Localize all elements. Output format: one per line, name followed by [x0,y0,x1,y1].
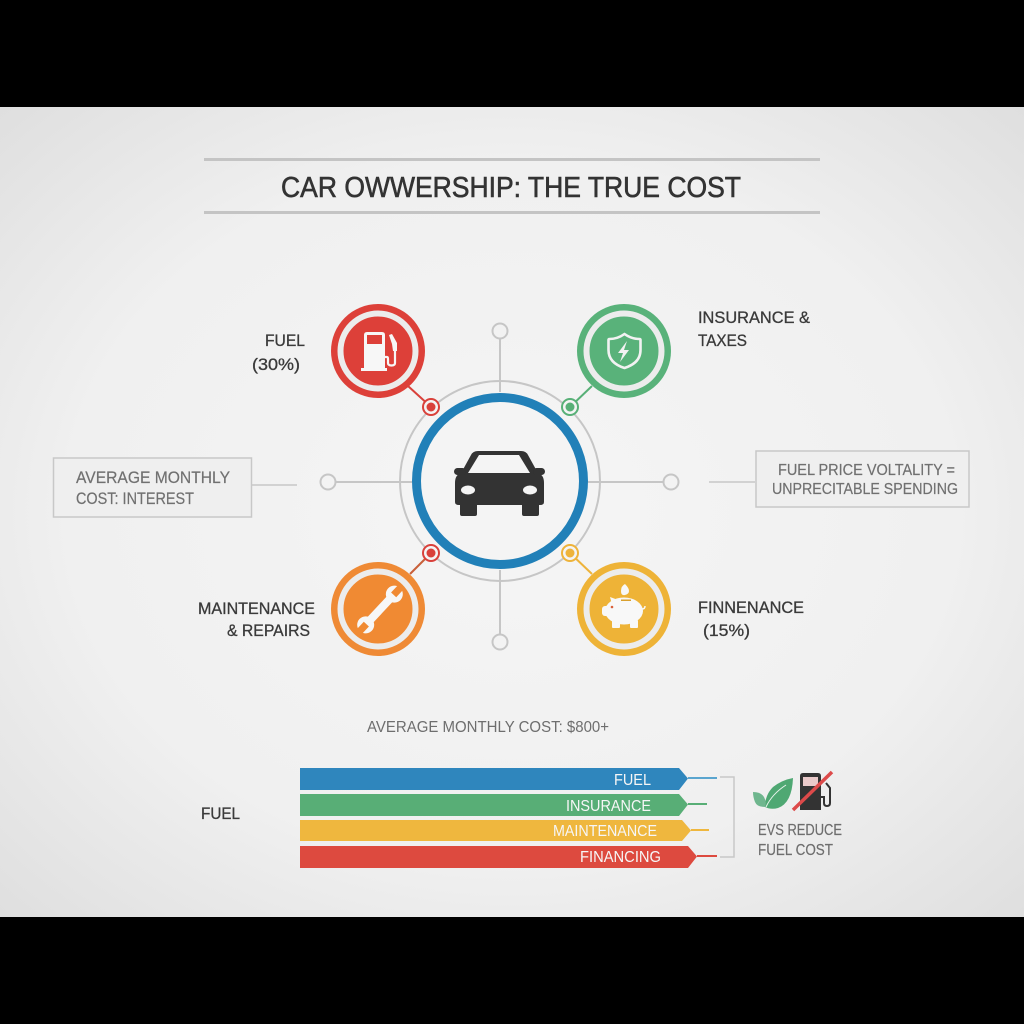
icon: fuel pump [361,332,397,371]
financing label: (15%) [703,622,750,640]
callout: average monthly cost: COST: INTEREST [76,490,194,508]
title block: CAR OWWERSHIP: THE TRUE COST [281,172,741,204]
maintenance node [331,545,439,656]
bar: maintenance: MAINTENANCE [553,823,657,840]
icon: leaf and crossed fuel pump [753,772,832,810]
callout: fuel price volatility: FUEL PRICE VOLTALITY = [778,462,955,479]
bar: maintenance [300,820,709,841]
evs note: FUEL COST [758,842,833,859]
maintenance label: MAINTENANCE [198,600,315,618]
icon: car [454,451,545,516]
bar: fuel: FUEL [614,772,651,789]
stacked cost bars [300,768,717,868]
callout: fuel price volatility: UNPRECITABLE SPENDING [772,481,958,498]
fuel node [331,304,439,415]
callout: average monthly cost: AVERAGE MONTHLY [76,469,230,487]
icon: piggy bank [602,584,645,628]
insurance node [562,304,671,415]
title block [204,158,820,214]
bar: insurance [300,794,707,816]
bar: financing: FINANCING [580,849,661,866]
financing node [562,545,671,656]
monthly cost heading: AVERAGE MONTHLY COST: $800+ [367,719,609,736]
icon: wrench [353,581,407,638]
maintenance label: & REPAIRS [227,622,310,640]
fuel label: (30%) [252,356,300,374]
bar: fuel [300,768,717,790]
fuel label: FUEL [265,332,305,350]
bar: insurance: INSURANCE [566,798,651,815]
insurance label: INSURANCE & [698,309,810,327]
bracket [720,777,734,857]
callout: fuel price volatility [709,451,969,507]
callout: average monthly cost [54,458,297,517]
central hub diagram [320,324,678,650]
icon: shield [608,334,640,368]
financing label: FINNENANCE [698,599,804,617]
background panel [0,107,1024,917]
insurance label: TAXES [698,332,747,350]
bar: financing [300,846,717,868]
row label: fuel: FUEL [201,805,240,823]
evs note: EVS REDUCE [758,822,842,839]
